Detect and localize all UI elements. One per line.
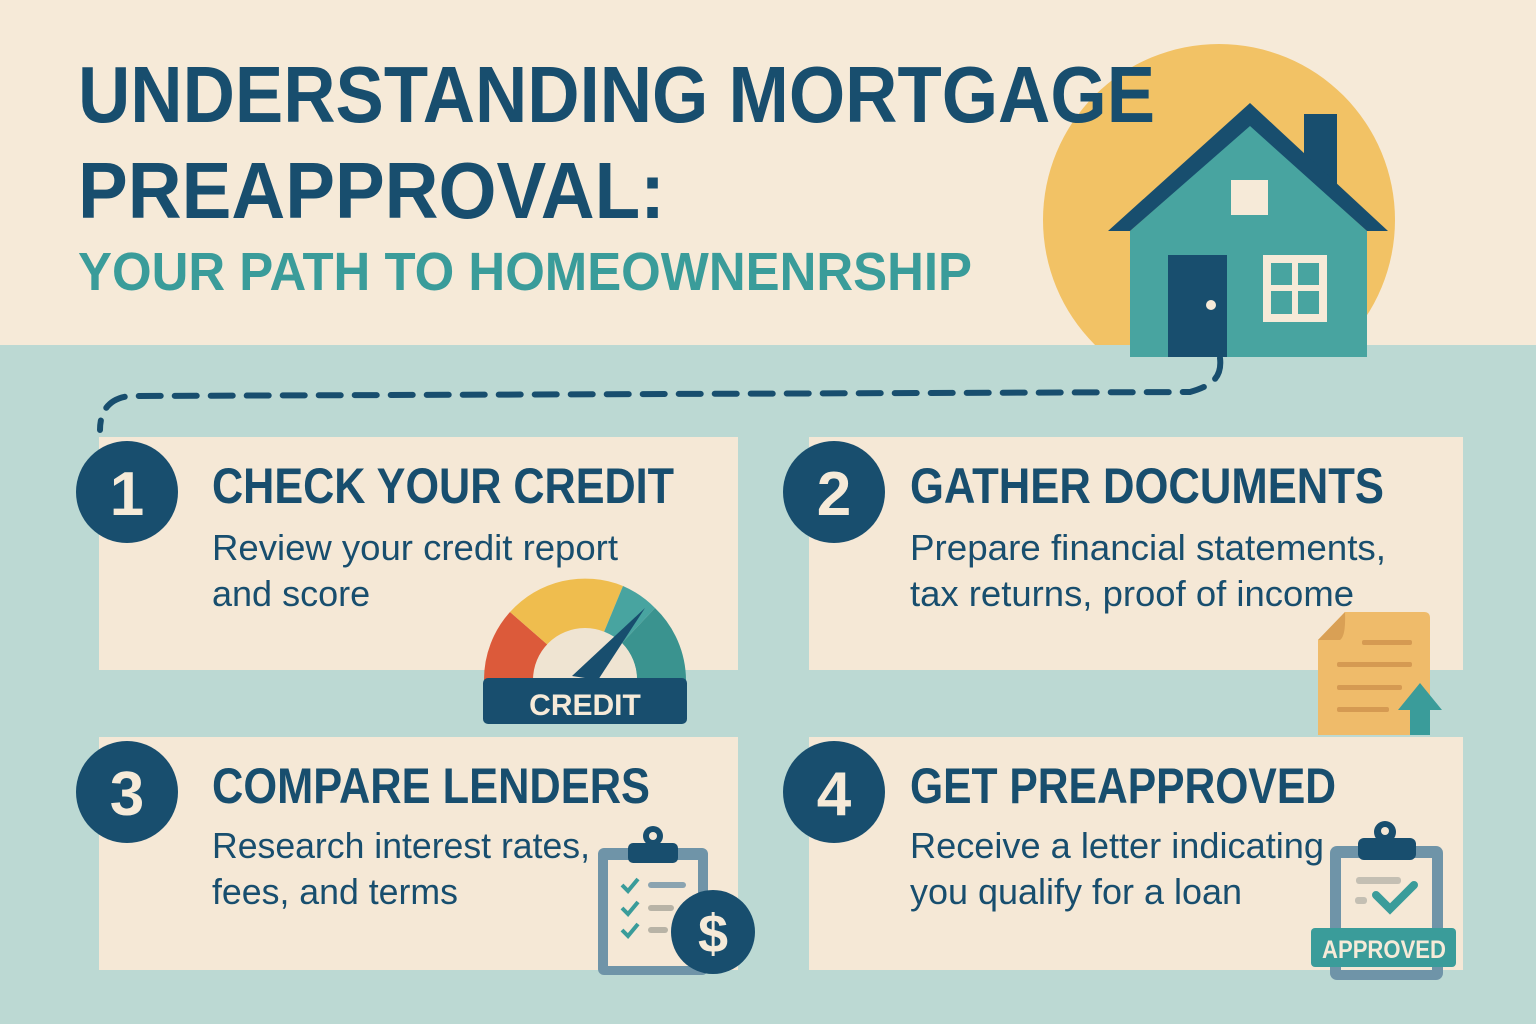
icon: approved clipboard: APPROVED xyxy=(1322,936,1446,964)
panel: step 2: Prepare financial statements, xyxy=(910,527,1386,568)
icon: credit gauge xyxy=(483,579,687,724)
icon: document with arrow xyxy=(1318,612,1442,735)
panel: step 3: COMPARE LENDERS xyxy=(212,758,650,814)
title: PREAPPROVAL: xyxy=(78,146,665,235)
panel: step 4: 4 xyxy=(817,760,852,829)
panel: step 2: 2 xyxy=(817,460,851,529)
panel: step 4: you qualify for a loan xyxy=(910,871,1242,912)
panel: step 4 xyxy=(783,737,1463,970)
arrow: dashed path xyxy=(100,358,1220,430)
icon: approved clipboard xyxy=(1311,821,1456,980)
title xyxy=(78,50,1155,235)
panel: step 3 xyxy=(76,737,738,970)
panel: step 3: fees, and terms xyxy=(212,871,458,912)
icon: clipboard with dollar xyxy=(598,826,755,975)
icon: clipboard with dollar: $ xyxy=(698,904,728,964)
panel: step 1: CHECK YOUR CREDIT xyxy=(212,458,674,514)
subtitle: YOUR PATH TO HOMEOWNENRSHIP xyxy=(78,242,972,302)
title: UNDERSTANDING MORTGAGE xyxy=(78,50,1155,139)
panel: step 4: Receive a letter indicating xyxy=(910,825,1324,866)
panel: step 3: 3 xyxy=(110,760,144,829)
panel: step 1: 1 xyxy=(110,460,144,529)
panel: step 1: and score xyxy=(212,573,370,614)
icon: sun xyxy=(1043,44,1395,345)
panel: step 2: tax returns, proof of income xyxy=(910,573,1354,614)
panel: step 2: GATHER DOCUMENTS xyxy=(910,458,1384,514)
panel: step 1: Review your credit report xyxy=(212,527,618,568)
icon: house xyxy=(1108,103,1388,357)
panel: step 2 xyxy=(783,437,1463,670)
panel: step 3: Research interest rates, xyxy=(212,825,590,866)
panel: step 1 xyxy=(76,437,738,670)
panel: step 4: GET PREAPPROVED xyxy=(910,758,1336,814)
icon: credit gauge: CREDIT xyxy=(529,689,641,722)
